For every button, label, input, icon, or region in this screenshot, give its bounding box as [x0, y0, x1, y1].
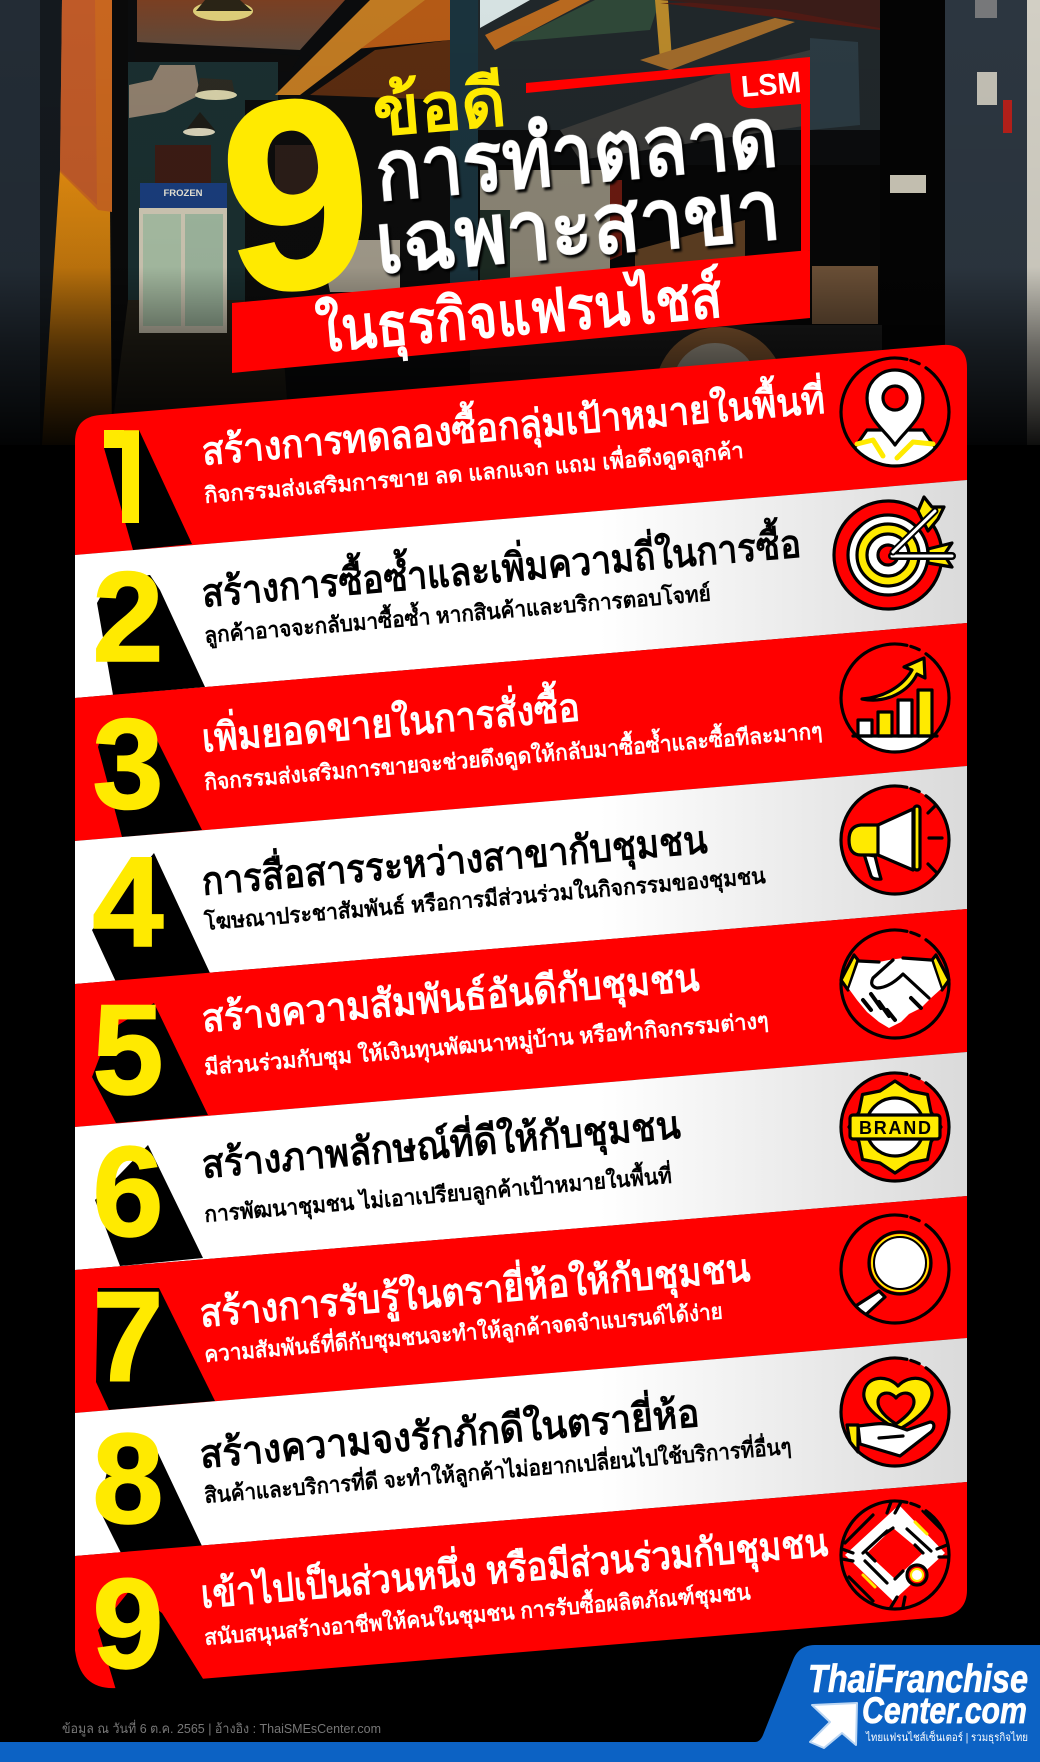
icon: target with arrows: [834, 497, 952, 609]
band 9: เข้าไปเป็นส่วนหนึ่ง หรือมีส่วนร่วมกับชุมชน: [199, 1514, 830, 1619]
band 7: [75, 1196, 967, 1413]
band 8: สินค้าและบริการที่ดี จะทำให้ลูกค้าไม่อยากเปลี่ยนไปใช้บริการที่อื่นๆ: [203, 1430, 793, 1510]
band 3: เพิ่มยอดขายในการสั่งซื้อ: [199, 678, 581, 761]
black pillar and switch: [880, 0, 945, 270]
red banner: [232, 250, 810, 373]
band 2: [75, 480, 967, 698]
title block: [211, 39, 810, 373]
icon: four linked arms: [839, 1499, 951, 1611]
pendant lamps and fan: [193, 4, 253, 21]
slate pillar: [945, 0, 1027, 445]
band 5: 5: [92, 979, 164, 1122]
band 8: [75, 1338, 967, 1556]
band 4: [75, 766, 967, 984]
freezer: [139, 208, 227, 333]
band 8: สร้างความจงรักภักดีในตรายี่ห้อ: [198, 1385, 701, 1477]
background photo: restaurant storefront: FROZEN: [163, 188, 203, 199]
band 2: ลูกค้าอาจจะกลับมาซื้อซ้ำ หากสินค้าและบริการตอบโจทย์: [203, 577, 712, 650]
heading: ข้อดี: ข้อดี: [370, 64, 509, 151]
band 2: สร้างการซื้อซ้ำและเพิ่มความถี่ในการซื้อ: [199, 515, 803, 616]
icon: magnifying glass: [839, 1213, 951, 1325]
counter and round logo: [550, 325, 882, 350]
red title frame with LSM tag: LSM: [740, 66, 802, 104]
icon: rising bar chart: [839, 642, 951, 754]
band 3: กิจกรรมส่งเสริมการขายจะช่วยดึงดูดให้กลับมาซื้อซ้ำและซื้อทีละมากๆ: [203, 714, 823, 797]
band 7: ความสัมพันธ์ที่ดีกับชุมชนจะทำให้ลูกค้าจดจำแบรนด์ได้ง่าย: [203, 1295, 724, 1369]
icon: logo arrow: [810, 1703, 857, 1748]
band 4: 4: [92, 831, 164, 974]
red title frame with LSM tag: [526, 57, 810, 252]
band 3: 3: [92, 693, 164, 836]
interior white counter: [320, 240, 400, 292]
band 5: [75, 909, 967, 1127]
band 4: การสื่อสารระหว่างสาขากับชุมชน: [200, 812, 709, 906]
band 6: สร้างภาพลักษณ์ที่ดีให้กับชุมชน: [200, 1097, 683, 1189]
orange roof panels: [310, 40, 450, 100]
wood box: [812, 266, 878, 324]
source note: ข้อมูล ณ วันที่ 6 ต.ค. 2565 | อ้างอิง : ThaiSMEsCenter.com: [62, 1720, 381, 1737]
band 5: มีส่วนร่วมกับชุม ให้เงินทุนพัฒนาหมู่บ้าน หรือทำกิจกรรมต่างๆ: [203, 1007, 770, 1082]
icon: megaphone: [820, 765, 970, 915]
band 3: [75, 623, 967, 841]
ceiling and beam: [137, 0, 345, 50]
panel: nine numbered bands: [75, 345, 967, 1696]
band 4: โฆษณาประชาสัมพันธ์ หรือการมีส่วนร่วมในกิจกรรมของชุมชน: [202, 862, 767, 937]
band 7: สร้างการรับรู้ในตรายี่ห้อให้กับชุมชน: [198, 1240, 752, 1338]
heading: การทำตลาด: การทำตลาด: [371, 89, 781, 218]
band 1: 1: [91, 408, 163, 551]
awning and roof: [478, 0, 880, 130]
teal post: [450, 0, 478, 285]
band 6: การพัฒนาชุมชน ไม่เอาเปรียบลูกค้าเป้าหมายในพื้นที่: [203, 1159, 673, 1229]
banner text: ในธุรกิจแฟรนไชส์: [313, 261, 725, 369]
painting: [155, 145, 211, 185]
band 1: สร้างการทดลองซื้อกลุ่มเป้าหมายในพื้นที่: [199, 371, 827, 476]
orange wall: [42, 170, 112, 445]
dark interior behind big nine: [245, 100, 278, 302]
band 1: กิจกรรมส่งเสริมการขาย ลด แลกแจก แถม เพื่อดึงดูดลูกค้า: [203, 434, 745, 510]
heading: เฉพาะสาขา: เฉพาะสาขา: [371, 162, 784, 291]
band 9: 9: [92, 1553, 164, 1696]
band 6: [75, 1052, 967, 1270]
band 1: [75, 345, 967, 555]
band 9: สนับสนุนสร้างอาชีพให้คนในชุมชน การรับซื้อผลิตภัณฑ์ชุมชน: [203, 1575, 752, 1652]
teal back wall: [128, 62, 278, 300]
band 8: 8: [92, 1408, 164, 1551]
band 6: 6: [92, 1121, 164, 1264]
icon: handshake: [820, 909, 970, 1059]
black centre: [478, 165, 880, 335]
band 9: [75, 1482, 967, 1696]
icon: heart in hand: [820, 1337, 970, 1487]
left pillar: [0, 0, 40, 445]
band 5: สร้างความสัมพันธ์อันดีกับชุมชน: [200, 954, 701, 1043]
icon: brand badge: [820, 1052, 970, 1202]
blue footer shape: [0, 1645, 1040, 1762]
band 2: 2: [92, 546, 164, 689]
icon: brand badge: BRAND: [859, 1118, 931, 1138]
band 7: 7: [92, 1266, 164, 1409]
footer logo block: [0, 1645, 1040, 1762]
background photo: restaurant storefront: [0, 0, 1040, 457]
big yellow number 9: 9: [211, 39, 382, 350]
dark post: [112, 0, 128, 445]
icon: map pin: [839, 356, 951, 468]
